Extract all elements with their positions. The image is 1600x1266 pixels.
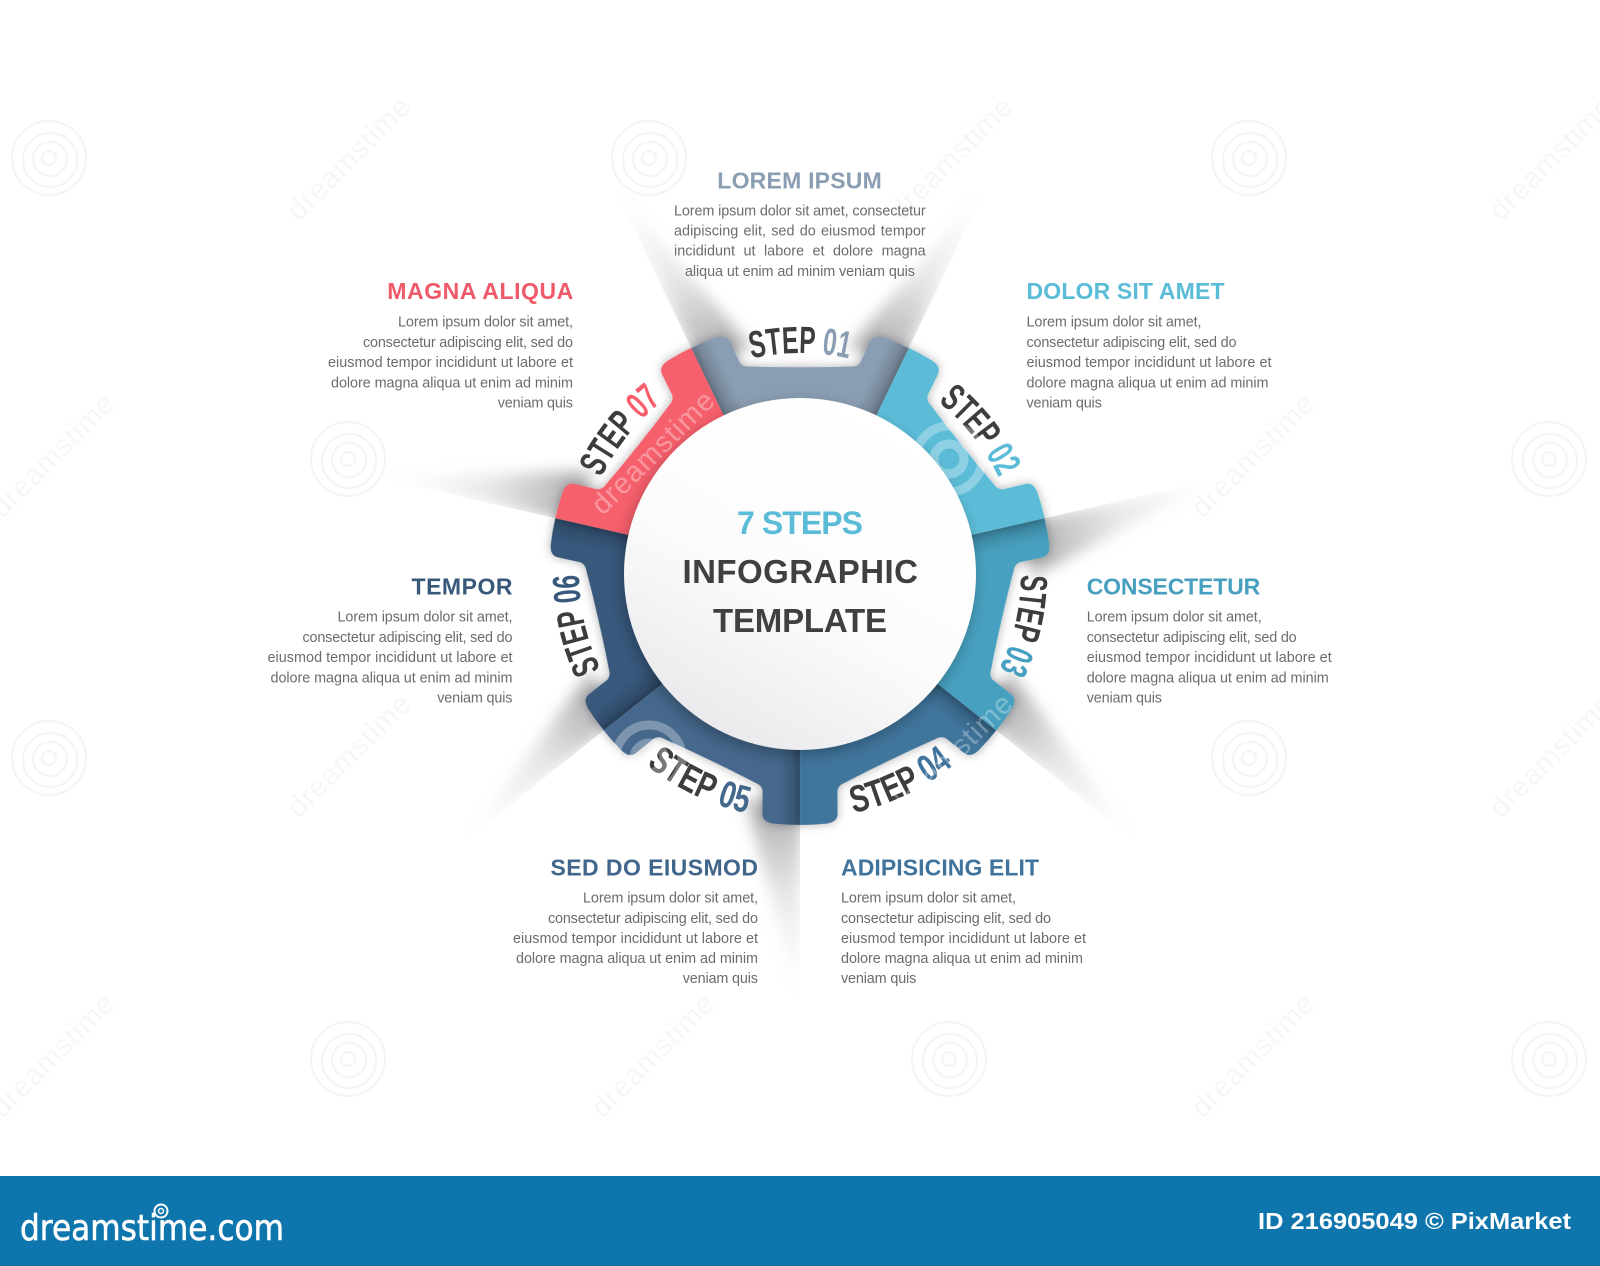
text block: adipisicing elit: ADIPISICING ELIT (841, 855, 1039, 881)
text block: magna aliqua (328, 278, 573, 411)
watermark pattern: dreamstime (1185, 387, 1322, 524)
text block: consectetur: eiusmod tempor incididunt ut labore et (1087, 650, 1332, 666)
text block: sed do eiusmod: eiusmod tempor incididunt ut labore et (513, 931, 758, 947)
text block: dolor sit amet (1026, 278, 1272, 411)
text block: magna aliqua: eiusmod tempor incididunt ut labore et (328, 355, 573, 371)
watermark pattern: dreamstime (883, 90, 1020, 227)
center title: TEMPLATE (713, 602, 887, 639)
watermark over ring: dreamstime (883, 687, 1020, 824)
segment: step 07 (546, 341, 748, 564)
step label: step 03: STEP 03 (1001, 576, 1048, 677)
text block: lorem ipsum: LOREM IPSUM (717, 168, 882, 194)
text block: adipisicing elit: Lorem ipsum dolor sit amet, (841, 891, 1016, 907)
text block: consectetur: CONSECTETUR (1087, 573, 1261, 599)
text block: lorem ipsum: Lorem ipsum dolor sit amet, consectetur (674, 203, 926, 219)
text block: consectetur: consectetur adipiscing elit, sed do (1087, 630, 1297, 646)
text block: dolor sit amet: eiusmod tempor incididunt ut labore et (1026, 355, 1272, 371)
text block: sed do eiusmod: veniam quis (683, 971, 758, 987)
text block: tempor (268, 573, 513, 706)
text block: lorem ipsum (674, 168, 926, 280)
step label: step 01: STEP 01 (749, 326, 850, 358)
text block: adipisicing elit: dolore magna aliqua ut enim ad minim (841, 951, 1083, 967)
segment: step 02 (852, 341, 1054, 564)
text block: tempor: eiusmod tempor incididunt ut labore et (268, 650, 512, 666)
text block: magna aliqua: MAGNA ALIQUA (387, 278, 573, 304)
text block: dolor sit amet: consectetur adipiscing elit, sed do (1026, 335, 1236, 351)
watermark pattern: dreamstime (585, 987, 722, 1124)
text block: tempor: consectetur adipiscing elit, sed do (302, 630, 512, 646)
text block: dolor sit amet: dolore magna aliqua ut enim ad minim (1026, 375, 1268, 391)
text block: sed do eiusmod: SED DO EIUSMOD (550, 855, 758, 881)
text block: consectetur: dolore magna aliqua ut enim ad minim (1087, 670, 1329, 686)
watermark pattern: dreamstime (1185, 987, 1322, 1124)
footer image id: ID 216905049 © PixMarket (1258, 1208, 1571, 1234)
text block: tempor: veniam quis (437, 690, 512, 706)
watermark pattern: dreamstime (281, 90, 418, 227)
text block: consectetur: Lorem ipsum dolor sit amet, (1087, 610, 1262, 626)
segment: step 04 (768, 665, 1001, 835)
center circle (624, 398, 976, 750)
text block: consectetur: veniam quis (1087, 690, 1162, 706)
text block: magna aliqua: veniam quis (498, 395, 573, 411)
text block: sed do eiusmod: consectetur adipiscing elit, sed do (548, 911, 758, 927)
step label: step 05: STEP 05 (650, 748, 752, 812)
text block: magna aliqua: Lorem ipsum dolor sit amet, (398, 315, 573, 331)
text block: consectetur (1087, 573, 1332, 706)
text block: magna aliqua: dolore magna aliqua ut enim ad minim (331, 375, 573, 391)
segment: step 03 (925, 502, 1056, 733)
seam shading on ring (551, 339, 1049, 824)
center title: INFOGRAPHIC (682, 553, 918, 590)
segment: step 01 (691, 336, 909, 421)
watermark over ring: dreamstime (585, 384, 722, 521)
fold shadow rays (443, 238, 1161, 942)
text block: lorem ipsum: incididunt ut labore et dolore magna (674, 244, 926, 260)
watermark over ring (585, 384, 1020, 824)
center title (682, 505, 918, 639)
text block: sed do eiusmod (513, 855, 758, 987)
text block: magna aliqua: consectetur adipiscing elit, sed do (363, 335, 573, 351)
text block: tempor: Lorem ipsum dolor sit amet, (338, 610, 512, 626)
text block: dolor sit amet: Lorem ipsum dolor sit amet, (1026, 315, 1202, 331)
segmented ring (544, 336, 1056, 835)
text block: lorem ipsum: adipiscing elit, sed do eiusmod tempor (674, 224, 926, 240)
text block: lorem ipsum: aliqua ut enim ad minim veniam quis (685, 264, 915, 280)
text block: adipisicing elit: eiusmod tempor incididunt ut labore et (841, 931, 1086, 947)
text block: dolor sit amet: DOLOR SIT AMET (1026, 278, 1224, 304)
text block: adipisicing elit: veniam quis (841, 971, 916, 987)
text block: adipisicing elit (841, 855, 1086, 987)
text block: adipisicing elit: consectetur adipiscing elit, sed do (841, 911, 1051, 927)
step label: step 06: STEP 06 (552, 576, 598, 676)
text block: dolor sit amet: veniam quis (1026, 395, 1102, 411)
footer band (0, 1176, 1600, 1266)
segment: step 06 (544, 502, 675, 733)
text block: sed do eiusmod: Lorem ipsum dolor sit amet, (583, 891, 758, 907)
step label: step 07: STEP 07 (580, 382, 657, 474)
text block: tempor: TEMPOR (412, 573, 513, 599)
text block: tempor: dolore magna aliqua ut enim ad minim (270, 670, 512, 686)
center title: 7 STEPS (737, 505, 863, 541)
watermark pattern: dreamstime (281, 687, 418, 824)
step label: step 04: STEP 04 (850, 746, 952, 812)
step label: step 02: STEP 02 (942, 384, 1020, 477)
segment: step 05 (599, 665, 832, 835)
footer logo: dreamstime.com (20, 1208, 284, 1249)
text block: sed do eiusmod: dolore magna aliqua ut enim ad minim (516, 951, 758, 967)
